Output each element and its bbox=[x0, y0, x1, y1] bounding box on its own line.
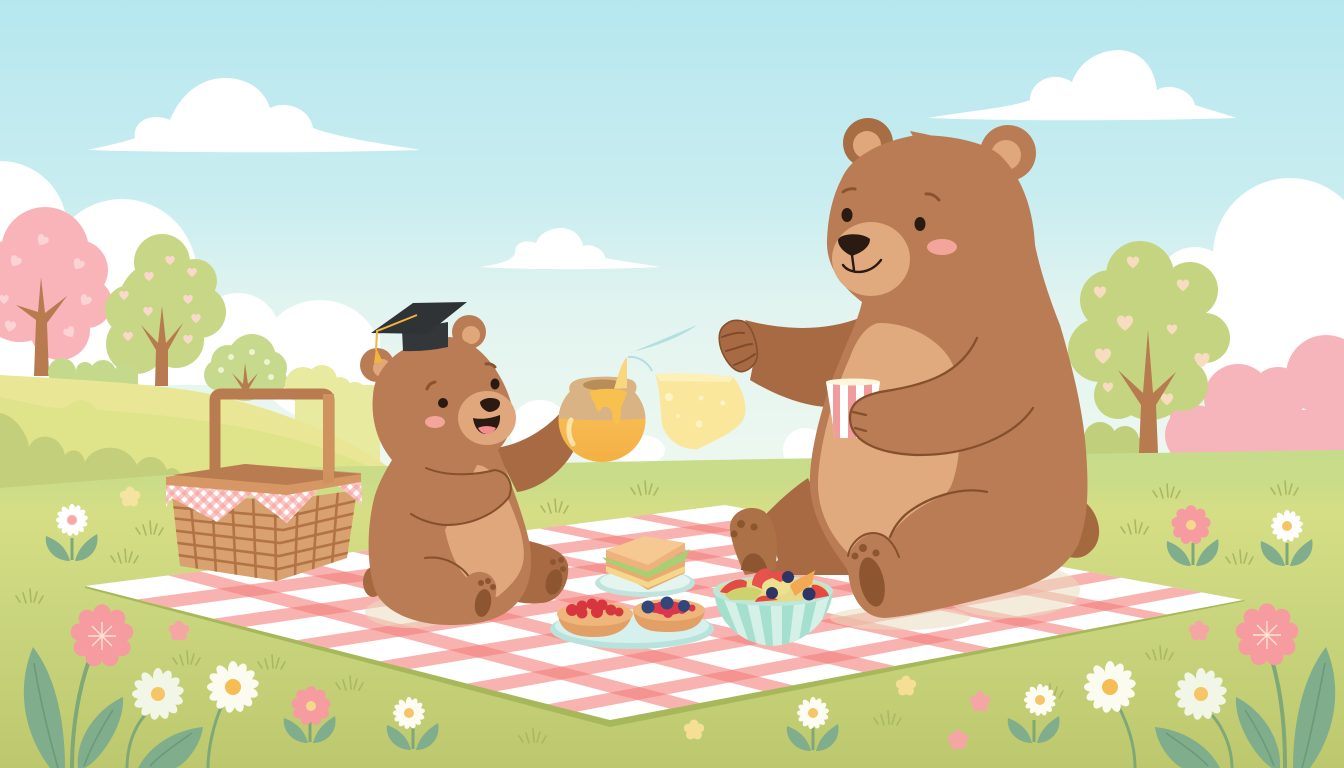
flower: small white centre bbox=[787, 697, 839, 751]
flower: small white left bbox=[387, 697, 439, 750]
graduation cap bbox=[371, 302, 467, 363]
big bear ear left bbox=[843, 118, 893, 168]
small bear far leg bbox=[500, 540, 568, 603]
lemonade pitcher bbox=[628, 325, 745, 449]
picnic blanket bbox=[85, 505, 1245, 727]
small bear face bbox=[425, 364, 516, 445]
flower: upper left white bbox=[46, 504, 98, 561]
small blossoms scattered bbox=[120, 486, 1209, 749]
big clouds: right horizon bbox=[1157, 178, 1344, 395]
tart: raspberry bbox=[557, 598, 633, 637]
big bear tail bump bbox=[1065, 503, 1099, 558]
flower: daisy right one bbox=[1084, 661, 1136, 768]
big bear face bbox=[832, 189, 957, 296]
bushes: back yellow bbox=[285, 365, 380, 470]
bushes: right pink bbox=[1165, 335, 1344, 465]
small bear belly bbox=[445, 465, 524, 597]
flower: upper right white bbox=[1261, 510, 1313, 566]
big bear far leg bbox=[730, 478, 850, 575]
small bear ear left bbox=[360, 348, 394, 382]
small bear ear right bbox=[452, 315, 486, 349]
tree: right bbox=[1068, 241, 1230, 453]
basket body bbox=[170, 490, 360, 582]
small bear body bbox=[369, 337, 531, 625]
ground bbox=[0, 450, 1344, 768]
flower: big pink left bbox=[69, 604, 135, 768]
small bear holding arm bbox=[411, 468, 511, 526]
big clouds: left horizon bbox=[0, 161, 827, 472]
big bear holding arm bbox=[850, 338, 1033, 455]
fruit bowl bbox=[713, 568, 833, 646]
bushes: left foreground bbox=[0, 413, 183, 490]
big bear leg line bbox=[890, 490, 987, 537]
small bear bbox=[360, 302, 573, 625]
leaf: left second bbox=[78, 697, 123, 768]
cloud: centre bbox=[480, 228, 660, 269]
basket gingham cloth bbox=[166, 478, 362, 523]
flower: small white right bbox=[1008, 684, 1060, 743]
tart: blueberry bbox=[633, 596, 705, 632]
small bear near foot bbox=[464, 572, 496, 620]
tree: pink left bbox=[0, 207, 112, 376]
leaf: tall right bbox=[1293, 647, 1335, 768]
big bear cup bbox=[826, 378, 880, 440]
cloud: top left bbox=[88, 78, 420, 152]
blanket shadow edge bbox=[85, 586, 1245, 727]
hill: left bbox=[0, 375, 392, 495]
basket handle bbox=[215, 394, 329, 485]
tree: green left bbox=[105, 234, 226, 386]
bushes: back left bbox=[48, 358, 138, 386]
honey pot highlight bbox=[569, 420, 573, 444]
hill: left lower bbox=[0, 397, 375, 495]
big bear extended arm bbox=[745, 317, 862, 407]
big bear bbox=[719, 118, 1099, 618]
flower: daisy left two bbox=[207, 661, 259, 768]
leaf: right third bbox=[1155, 727, 1220, 768]
big bear body bbox=[810, 135, 1087, 618]
honey pot drip bbox=[590, 389, 627, 424]
basket lid bbox=[166, 464, 361, 495]
leaf: tall left bbox=[24, 647, 65, 768]
picnic basket bbox=[166, 394, 362, 582]
flower: daisy left one bbox=[127, 668, 184, 768]
flower: small pink left bbox=[284, 686, 336, 743]
big bear ear right bbox=[980, 125, 1036, 181]
big bear fist bbox=[719, 320, 757, 372]
flower: upper right pink bbox=[1167, 505, 1219, 566]
sandwich plate bbox=[595, 536, 695, 597]
tart plate bbox=[550, 596, 714, 649]
small bear back bump bbox=[363, 567, 383, 597]
lemonade stream bbox=[614, 357, 627, 389]
flower: daisy right two bbox=[1175, 668, 1232, 768]
sky bbox=[0, 0, 1344, 500]
small bear near leg line bbox=[425, 558, 470, 578]
grass tufts bbox=[16, 481, 1298, 743]
leaf: left third bbox=[138, 727, 203, 768]
tree: small back bush tree bbox=[204, 334, 287, 401]
fruit salad bbox=[720, 568, 829, 602]
small bear extended arm bbox=[495, 413, 573, 492]
bush: behind right tree bbox=[1084, 422, 1145, 454]
flower: big pink right bbox=[1234, 603, 1300, 768]
bear shadows on blanket bbox=[365, 562, 1080, 630]
big bear belly bbox=[818, 323, 960, 553]
cloud: top right bbox=[928, 50, 1237, 120]
sandwich bbox=[602, 536, 690, 590]
big bear near foot bbox=[848, 533, 900, 615]
honey pot bbox=[558, 376, 646, 462]
leaf: right second bbox=[1236, 697, 1280, 768]
